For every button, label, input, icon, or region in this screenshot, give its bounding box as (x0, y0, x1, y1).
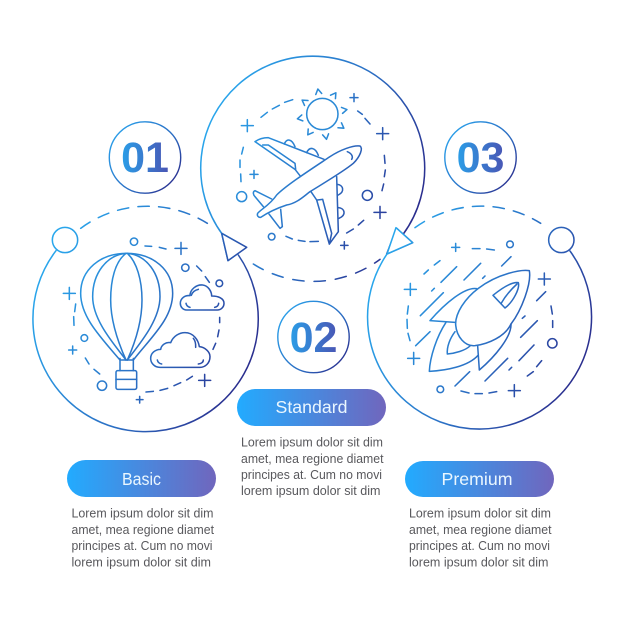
text block: Standard description (241, 434, 384, 498)
icon: large cloud (151, 333, 210, 367)
panel: premium circle (368, 206, 592, 429)
center orbit ring (201, 56, 425, 281)
badge: 01 (109, 122, 181, 193)
left orbit ring (33, 206, 258, 432)
text block: Premium description: amet, mea regione diamet (409, 522, 552, 537)
pill: Basic: Basic (122, 469, 161, 489)
pill: Premium: Premium (442, 469, 512, 489)
badge: 01: 01 (121, 134, 169, 182)
icon: small cloud (180, 285, 224, 310)
decor: dashes, dots and plus signs around balloon (63, 238, 223, 403)
panel: basic circle (33, 206, 258, 432)
badge: 02: 02 (290, 314, 337, 362)
arrowhead: center left (222, 233, 246, 261)
icon: rocket (429, 270, 530, 371)
badge: 03: 03 (457, 134, 504, 182)
pill: Premium (405, 461, 554, 497)
arrowhead: center right (387, 228, 413, 254)
pill: Basic (67, 460, 216, 497)
icon: hot air balloon (81, 253, 173, 389)
text block: Standard description: lorem ipsum dolor sit dim (241, 483, 380, 498)
text block: Standard description: Lorem ipsum dolor sit dim (241, 434, 383, 450)
text block: Basic description: principes at. Cum no movi (72, 538, 213, 553)
text block: Basic description (72, 506, 214, 570)
text block: Premium description: principes at. Cum no movi (409, 538, 550, 553)
text block: Basic description: lorem ipsum dolor sit dim (72, 554, 211, 570)
badge: 03 (445, 122, 516, 193)
decor: speed lines, dots and plus signs around rocket (404, 241, 557, 397)
text block: Basic description: Lorem ipsum dolor sit dim (72, 506, 214, 520)
right orbit ring (368, 206, 592, 429)
arrowhead: left (222, 233, 247, 261)
icon: sun (297, 89, 347, 140)
pill: Standard: Standard (276, 397, 348, 417)
pill: Standard (237, 389, 386, 426)
text block: Basic description: amet, mea regione diamet (72, 522, 214, 537)
text block: Premium description: Lorem ipsum dolor sit dim (409, 506, 551, 520)
text block: Premium description (409, 506, 552, 570)
text block: Standard description: amet, mea regione diamet (241, 451, 384, 466)
badge: 02 (278, 301, 349, 373)
text block: Premium description: lorem ipsum dolor sit dim (409, 554, 548, 570)
icon: airplane (253, 138, 361, 244)
panel: standard circle (201, 56, 425, 281)
text block: Standard description: principes at. Cum no movi (241, 467, 382, 482)
decor: dashes, dots and plus signs around airplane (237, 94, 389, 249)
arrowhead: right (387, 228, 413, 254)
